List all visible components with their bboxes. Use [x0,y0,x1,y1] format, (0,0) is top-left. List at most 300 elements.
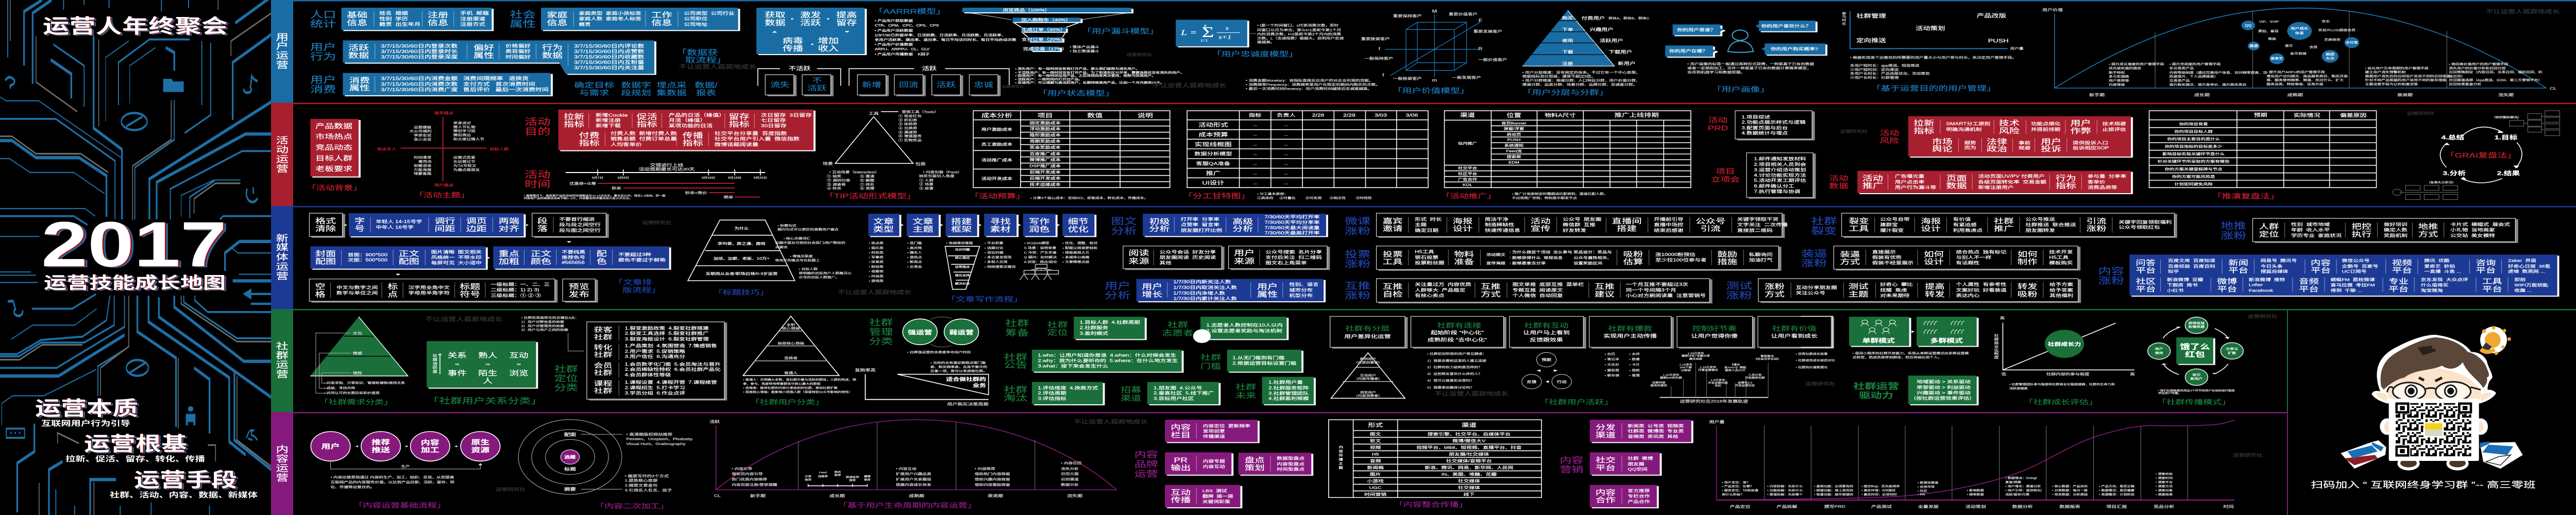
chart: 社群成长评估: 低 [2002,372,2006,376]
panel: 内容栏目: 呈现创意 [1203,428,1225,433]
table: 活动推广: 搜索框 [1506,154,1521,159]
watermark: 不让运营人孤寂地成长 [1074,419,1148,425]
chart: 产品生命周期S曲线: 数据报表 [2059,504,2080,509]
card: 投票涨粉: 物料 [1454,250,1474,259]
chart: 社群传播模式: 红包 [2185,350,2205,358]
table: 内容整合传播: 小游戏 [1367,478,1384,483]
chart: 产品生命周期S曲线: • 用户增长：渠道分析 [2005,485,2041,488]
card: 互推涨粉: 同一个号间隔3个月 [1626,287,1676,293]
chart: 社群传播模式: 获得收益 [2189,321,2205,325]
panel: 内容涨粉平台: 搜狐自媒体 [2261,269,2289,273]
panel: 社群用户关系分类: 度 [433,369,437,373]
table: 分工甘特图: 2/29 [1343,113,1355,118]
card: 地推涨粉: 卡片式 横幅式 展会式 [2450,221,2510,227]
table: 活动推广: 社区平台 [1458,171,1477,176]
heading: 社群志愿者: 志愿者 [1162,329,1193,337]
card: 互推涨粉: 专题互推 阅读原文 [1513,287,1563,293]
panel: 社群门槛: 1.从无门槛到有门槛 [1232,355,1285,360]
table: 内容整合传播: 时间营销 [1364,492,1386,496]
chart: 社群成长评估: 社 [1994,333,1999,338]
chart: 基于运营目的的用户管理: 少用户短时间：定向推送 [1850,67,1899,72]
chart: 社群需求分类金字塔 [310,317,408,395]
chart: 社群成长评估: 群 [1994,337,1999,341]
panel: 内容涨粉平台: 好奇心日报 36氪 [2508,264,2550,268]
chart: 用户价值模型立方体 [1246,9,1507,91]
text: 忠诚度说明: 度越高。 [1257,40,1275,44]
table: 活动推广: 站内推广 [1458,141,1477,145]
panel: 盘点策划: 数据型盘点 [1277,456,1304,460]
chart: 用户生命周期曲线: 建立用户流失预警机制 [2365,70,2406,74]
panel: 活动数据: 用户点击率 [1895,179,1924,184]
table: 活动预算: 百度推广成本 [1030,151,1061,156]
chart: 用户分层金字塔: 下载 [1562,49,1573,54]
chart: 适合做社群的业务: 适合做社群的 [946,376,986,382]
panel: 基础信息 注册信息: 性别 学历 [379,16,408,22]
panel: 活动风险: 并提前排期 [2031,127,2060,132]
text: AARRR 说明: • 产品用户活跃数据 [875,28,913,32]
card: 测试涨粉: 提高 [1925,283,1945,290]
chart: 2016年发展轨迹: 《社会化学互动》 [1754,357,1781,360]
chart: 社群传播模式 [2148,317,2243,395]
text: 用户常见顾虑: 3）这些群友喜欢什么样的人？ [1427,372,1482,376]
panel: 封面配图 正文配图: 次图：500*500 [348,257,388,263]
panel: 重点加粗 正文颜色 配色: 不要超过3种 [618,252,651,257]
chart: 用户分层金字塔: 付费用户 [1582,15,1605,21]
table: 分工甘特图 [1187,111,1428,187]
panel: 活动目的指标: 人均客单价 [611,142,642,147]
table: 活动推广: PUSH [1507,138,1521,142]
card: 测试涨粉: 关注公众号 [1796,290,1825,296]
chart: 社群传播模式: 吸引 [2193,373,2200,377]
panel: 封面配图 正文配图: 封面 [315,250,336,258]
card: 微课涨粉: 结束后感谢 [1654,228,1684,233]
card: 互推涨粉: 互推 [1383,283,1402,290]
heading: 社群管理分类: 分类 [869,337,893,346]
text: 忠诚度说明: • t是一个时间窗口，s代表消费次数，若时 [1257,23,1339,27]
text: 写作流程清单: • 网络搜索关键词 [985,265,1015,269]
card: 测试涨粉: 互动分享朋友圈 [1796,285,1837,290]
table: 活动推广: 系统通知 [1504,143,1523,147]
panel: 活动背景: 竞品动态 [315,144,352,151]
card: 项目立项会: 4.讨论功能实现方法 [1754,173,1806,178]
card: 地推涨粉 [2252,218,2515,242]
heading: 社群定位分类: 分类 [554,383,578,392]
table: 分工甘特图: ... [1284,181,1288,185]
panel: 封面配图 正文配图 [310,246,486,269]
tab label: 用户运营: 户 [276,42,289,51]
chart: 标题技巧: 众号的目标人群推广。 [799,276,839,279]
panel: 多群模式: 多群模式 [1930,337,1963,344]
table: 推演复盘法 [2149,111,2377,187]
chart: 内容运营生命周期曲线: • 内容推荐 [975,467,995,471]
panel: 社群运营驱动力: 地域驱动 > 关系驱动 [1917,379,1971,385]
text: 写作流程清单: • 反常态 [907,265,922,269]
panel: 社群未来: 3.社群管理团队 [1268,390,1309,396]
panel: 封面配图 正文配图: 配图 [399,258,419,266]
chart: 内容二次加工: Visual Hunt、Gratisography [626,442,686,446]
card: 社群定位分类: 1.裂变激励政策 4.裂变社群搭建 [625,325,709,331]
chart: 活动主题四象限: 情人节礼物 [453,125,476,129]
panel: 基础信息 注册信息: 注册渠道 [460,16,485,22]
chart: 内容运营生命周期曲线: • 内容引导 [732,467,752,471]
heading: 用户分析: 用户 [1105,281,1130,291]
table: 分工甘特图: ... [1253,123,1257,127]
heading: 内容品牌运营: 运营 [1134,470,1158,479]
card: 地推涨粉: 地推 [2418,222,2438,231]
chart: TIP活动形式模型: 营销工具（Tools） [902,110,939,114]
chart: 用户生命周期曲线: 益召回） [2449,74,2465,78]
watermark: 不让运营人孤寂地成长 [679,63,756,70]
chart: 用户生命周期曲线: 交易类产品 [2170,79,2190,82]
table: 内容整合传播: 内 [1338,445,1343,449]
panel: 活动风险: 风险 [1999,127,2020,135]
panel: 用户增长 用户属性: 属性 [1257,290,1278,299]
panel: 社群志愿者 [1193,317,1286,343]
chart: TIP活动形式模型: ④ 秒杀 [827,186,841,191]
panel: 内容栏目: 传播渠道 [1203,434,1225,439]
panel: 社群定位: 3.盈利模式 [1080,331,1108,336]
card: 社群裂变 [1842,213,2174,236]
chart: 产品生命周期S曲线: • 数据情况：是否健康 [2099,489,2134,492]
table: 推演复盘法: 实际情况 [2294,112,2320,118]
chart: 活动主题四象限: 用户痛点 [434,183,453,187]
panel: 社群运营驱动力: 荣誉驱动 > 利益驱动 [1917,385,1971,390]
heading: 社群管理分类 [869,318,893,346]
chart: TIP活动形式模型 [823,110,962,191]
heading: 装逼涨粉: 涨粉 [1801,258,1827,268]
chart: 产品生命周期S曲线: • 调查对象 [2156,489,2173,492]
card: 阅读来源: 来源 [1128,257,1149,265]
card: 投票涨粉: 至少拉100位参与者 [1655,257,1706,263]
panel: 活跃数据 偏好属性 行为数据: 3/7/15/30/60日内互粉量 [574,59,644,65]
chart: 用户生命周期曲线: • 提升用户ARPU的用户管理手段 [2266,70,2325,74]
panel: 内容涨粉平台: 百度文库 百度知道 [2168,258,2215,263]
chart: 活动主题四象限: 毒鸡汤 [418,159,432,164]
card: 活动PRD: 4.数据统计与埋点 [1741,130,1788,136]
chart: 产品生命周期S曲线: 复盘/规模 [2005,480,2021,484]
panel: AARRR 流程: 获取 [765,11,786,19]
table: 内容整合传播: 形式 [1368,422,1383,428]
chart: 用户价值模型立方体: f [1382,73,1384,78]
panel: 内容合作: 官方推荐 [1628,488,1650,493]
chart: 适合做社群的业务: 业务 [973,382,986,388]
chart: 用户价值模型立方体: 一般保持客户 [1364,56,1393,60]
panel: 家庭信息 工作信息: 公司类型 公司行业 [684,10,735,16]
panel: 活动目的指标: 付费 [579,131,600,140]
table: 内容整合传播: 社交媒体/音频平台 [1446,458,1492,463]
table: 活动预算: DSP推广成本 [1029,163,1061,168]
tab label: 社群运营: 运 [276,360,289,370]
chart: GRAI复盘法: （树状图拆解法） [2492,116,2521,119]
card: 测试涨粉: 表达内心 [1956,293,1980,298]
chart: 用户画像: • 用户画像的标签一般通过两种形式获得，一种是基于已有的数据 [1687,62,1815,66]
chart: 内容运营生命周期曲线 [709,419,1116,498]
chart: 用户生命周期曲线: QQ [2245,24,2252,27]
chart: 活动主题四象限: 张小龙说 [414,137,432,142]
card: 投票涨粉: : 为什么做这个活动 怎么参与 [1510,250,1572,254]
arrow: 单群到多群 [1911,331,1914,333]
chart: 用户生命周期曲线: 爱奇艺 [2270,57,2283,60]
text: 写作流程清单: S 场景：说明背景 [1024,246,1056,250]
text: 用户常见顾虑: • 社群初创阶段的用户常见顾虑： [1427,352,1486,356]
panel: 活跃数据 偏好属性 行为数据: 3/7/15/30/60日内收藏数 [574,54,644,60]
chart: 2016年发展轨迹: 服务的提供 [1651,384,1667,387]
chart: 强运营弱运营: 高、购买频率高，且其平衡中的 [930,365,987,369]
panel: 文章写作流程卡片: 写作 [1029,217,1049,226]
heading: 社群传播模式: 「社群传播模式」 [2157,399,2231,406]
panel: PR输出: 内容专题 [1203,459,1225,464]
chart: 内容运营生命周期曲线: 扩展用户兴趣品类 [896,472,931,476]
chart: 用户画像: 你的用户是谁？ [1677,27,1716,32]
chart: 用户状态模型: 活跃 [807,84,826,92]
chart: 产品生命周期S曲线: • 突发数据：分析原因 [2052,493,2088,496]
chart: 用户状态模型: 新增 [862,81,882,89]
chart: 用户画像: 会用到机器学习和数据挖掘。 [1687,70,1745,74]
chart: 标题技巧: 互联网从业者/职场白领/0-3岁运营 [706,271,777,276]
panel: 盘点策划 [1239,453,1311,475]
panel: 活跃数据 偏好属性 行为数据: 属性 [473,52,494,60]
chart: 预期行动反馈循环: 行动 [1557,380,1567,384]
card: 段落: 段与图之间空行 [559,228,601,233]
chart: 用户生命周期曲线: 滴币 [2285,44,2293,48]
text: 写作流程清单: • 优化、调整、校对 [1062,241,1097,245]
panel: 活动风险: 政治 [1987,145,2007,153]
cards: 社群用户活跃要素: 社群有连接 [1437,322,1481,329]
table: 活动推广: 启动页 [1506,132,1521,136]
panel: 活动目的指标: 指标 [729,120,750,128]
panel: 内容涨粉平台: 新浪微博 推特 [2249,277,2285,282]
heading: 测试涨粉: 涨粉 [1726,290,1752,300]
heading: 装逼涨粉: 装逼 [1801,249,1827,259]
table: 内容整合传播: 题 [1338,466,1344,470]
chart: 产品生命周期S曲线: • 渠道拆解：先拆哪个 [1767,493,1803,496]
text: 单群多群说明 [1853,351,1969,359]
card: 项目立项会: 1.邮件通知发放材料 [1754,156,1806,162]
chart: 社群成长评估: 活跃度越高 [2009,387,2028,390]
card: 微课涨粉: 开播前引导 [1654,216,1684,222]
text: 预算说明: • 计算4个核心成本：活动ROI，获客成本，转化成本，传播成本。 [1030,196,1148,200]
panel: 内容涨粉平台: 今日头条 [2261,264,2283,268]
heading: 微课涨粉: 微课 [1345,216,1371,226]
panel: 活动目的指标: 微博话题阅读量 [715,142,759,147]
panel: 社群用户关系分类 [427,341,536,388]
table: 分工甘特图: ... [1253,162,1257,166]
table: 内容整合传播: 视频平台、blibli、短视频、直播平台、抖音 [1416,445,1522,450]
heading: 用户分析 [1105,281,1130,300]
panel: 封面配图 正文配图: 首图：900*500 [348,252,388,258]
text: 单群多群说明: • 借用小程序的社群开放能力，实现从单群运营模式向多群运营模 [1853,351,1969,355]
card: 投票涨粉: 投票 [1383,250,1402,259]
card: 项目立项会: 7.执行管理与协调 [1754,188,1800,194]
text: 周边物料: • 帆布袋 [1604,373,1619,377]
table: 分工甘特图: ... [1253,133,1257,136]
chart: 用户生命周期曲线: 支付宝 [2346,41,2358,44]
cards: 社群用户活跃要素: 社群有爆款 [1608,325,1652,332]
panel: 社群用户关系分类: 事件 [448,370,467,377]
chart: 用户状态模型: 活跃 [937,81,956,89]
chart: 用户价值模型立方体: F [1479,19,1482,23]
text: 周边物料: • 卡片 [1629,363,1640,367]
heading: 活动PRD: PRD [1708,125,1728,132]
heading: 用户忠诚度模型: 「用户忠诚度模型」 [1212,50,1298,58]
panel: 封面配图 正文配图: 正文 [399,250,419,258]
chart: 用户状态模型: • 回流用户：有一段时间没用产品，之后突然回来再次使用，则称为回流用户。 [1015,74,1156,78]
panel: 内容涨粉平台: 平台 [2388,285,2409,293]
panel: 用户忠诚度公式: L = [1180,28,1197,37]
chart: 基于运营目的的用户管理: 社群管理 [1856,13,1886,19]
card: 社群定位分类: 2.裂变工具选择 5.裂变社群推广 [625,331,709,336]
panel: 消费属性: 3/7/15/30/60日内消费金额 消费间隔频率 退换货 [381,76,529,81]
icon: head [2371,335,2496,403]
card: 地推涨粉: 确定人数 [2384,227,2408,233]
panel: 社交平台: QQ空间 [1628,467,1648,471]
panel: 文章写作流程卡片: 文章 [873,217,894,226]
chart: 用户生命周期曲线: 针对不同产品根据的用户采用不同的留存措施 [2365,78,2447,82]
chart: 社群用户分类金字塔: 全职 [786,322,795,327]
card: 微课涨粉: 海报 [1453,217,1473,225]
chart: 社群需求分类金字塔: • 问答求助、分享知识、管理和储物/维持关系 [324,381,405,385]
panel: 活跃数据 偏好属性 行为数据: 3/7/15/30/60日内评论数 [574,43,644,49]
chart: 内容运营基础流程: 资源 [471,447,490,454]
chart: 产品生命周期S曲线: • 日常数据：每日一报 [2052,489,2088,492]
chart: 用户生命周期曲线: 大众 [2326,56,2335,60]
heading: 文章写作流程: 「文章写作流程」 [946,296,1023,303]
chart: TIP活动形式模型: 包装 [916,161,926,166]
panel: 分发渠道: 音频类 资讯类 其他 [1628,434,1678,439]
heading: 内容涨粉: 内容 [2098,266,2124,277]
chart: 用户生命周期曲线: 召回渠道选择（App推送、EDM、第三方营销平台） [2449,78,2543,82]
card: 投票涨粉: 吸粉 [1623,250,1643,259]
heading: 社群志愿者 [1162,321,1193,337]
panel: 初级分析 高级分析: 7/30/60天平均分享率 [1264,219,1320,225]
text: 写作流程清单: • 新观点 [907,260,922,264]
panel: 基础信息 注册信息 [342,8,492,30]
panel: PR输出 [1165,452,1231,475]
panel: 内容涨粉平台: 爱奇艺 秒拍 [2424,264,2455,268]
card: 互推涨粉: 图文单推 底部互推 菜单栏 [1513,282,1584,287]
chart: 活动时间轴: • 通常情况下，每类型产品的活动时间周期会在10-15天左右，最长至30天，短至1-3活动。而一般 [524,194,666,197]
card: 投票涨粉: H5工具 [1415,249,1434,254]
chart: 用户分层金字塔: 兴趣用户 [1590,27,1614,32]
panel: 文章写作流程卡片 [868,214,1094,236]
card: 用户来源: 支付后关注 扫二维码 [1265,254,1322,260]
chart: 产品生命周期S曲线: • 社区 [1918,489,1927,492]
chart: 用户分层金字塔: 下单 [1562,27,1573,32]
chart: 活动主题四象限: 李彦宏说 [414,133,432,138]
text: 社群价值: • 优秀社群成长故事 [1796,352,1827,355]
heading: 用户分析: 分析 [1105,290,1130,300]
panel: 互动传播: 互动 [1171,489,1191,496]
card: 投票涨粉: 宣传海报 [1486,261,1505,265]
icon: books right [2480,441,2523,469]
chart: 用户生命周期曲线: 京豆/PLUS/超级会员 [2318,28,2355,32]
crop zone: row 3, right [1801,213,2557,296]
card: 社群裂变: 爆汁裂变 [1880,228,1904,233]
card: 微课涨粉: 宣传 [1531,225,1550,233]
card: 投票涨粉: 鼓励 [1717,250,1737,259]
panel: AARRR 流程: 数据 [765,19,786,27]
panel: 基础信息 注册信息: 籍贯 出生年月 [379,22,420,27]
text: 写作流程清单: • 造热点 [907,255,922,259]
card: 项目立项会: 6.邮件确认分工 [1754,183,1794,188]
chart: 活动时间轴: 9月8日 [618,177,629,180]
chart: 内容二次加工: • 摘要写作的3个方式 [625,474,669,478]
card: 装逼涨粉: 设计 [1924,258,1944,266]
chart: 社群传播模式: 扩散 [2228,351,2236,355]
card: 互推涨粉 [1377,279,1709,302]
heading: 数据获取流程: 取流程」 [683,56,726,64]
heading: 社群用户分类: 「社群用户分类」 [751,399,824,406]
text: AARRR 说明: • 产品用户传播数据 K因子 [875,52,930,56]
heading: 微课涨粉 [1345,216,1371,236]
text: 高转化关键: 3）用户与用户之间的依赖 [521,328,568,332]
panel: 活跃数据 偏好属性 行为数据: 偏好 [473,44,494,52]
heading: 活动时间: 活动 [524,169,550,180]
chart: 2016年发展轨迹: 1.6日发布 [1710,379,1725,382]
panel: 活动数据: 活动 [1862,174,1883,182]
chart: 社群用户分类金字塔 [743,316,856,393]
panel: 用户忠诚度公式: n [1204,23,1207,27]
heading: 社群定位: 定位 [1047,329,1068,337]
text: 漏斗说明: • 独立渠道漏斗 [1070,49,1099,53]
text: 拉新促活留存转化传播: 拉新、促活、留存、转化、传播 [65,455,205,463]
table: 分工甘特图: 客服QA准备 [1196,161,1231,166]
heading: 社群管理分类: 社群 [869,318,893,328]
table: 分工甘特图: ... [1253,181,1257,185]
panel: 活跃数据 偏好属性 行为数据: 3/7/15/30/60日内关注量 [574,65,644,71]
panel: 文章写作流程卡片: 框架 [951,225,972,233]
panel: 封面配图 正文配图: 每屏可见 大小适中 [431,260,482,266]
heading: 社群筹备 公告 淘汰 [1004,319,1029,403]
chart: TIP活动形式模型: ④ 兑换券 [899,126,918,130]
heading: 投票涨粉: 投票 [1345,249,1370,260]
card: 微课涨粉: 引流 [1701,225,1721,233]
panel: 活动数据: 消费品类等 [2088,184,2117,190]
panel: 内容涨粉平台: 小红书 [2167,288,2183,293]
card: 测试涨粉: 给予方案 [2049,282,2073,287]
panel: 文章写作流程卡片: 素材 [990,225,1011,233]
panel: 家庭信息 工作信息: 家庭类型 家庭小孩标签 [579,10,641,16]
panel: 招募渠道: 2.垂直社区 5.线下推广 [1154,390,1214,396]
panel: 内容涨粉平台: 微信公众号 [2342,258,2369,263]
text: 数据获取流程步骤 [574,81,718,97]
card: 社群定位分类: 社群 [594,369,613,376]
chart: 社群用户分类金字塔: 核心领袖 [782,326,800,331]
card: 装逼涨粉: 模板购买 [2049,260,2073,266]
watermark: 运营研究社 [1127,52,1153,57]
panel: 盘点策划: 策划 [1245,464,1265,472]
panel: 社群用户关系分类: 跃 [433,366,437,369]
icon: QR code [2389,399,2479,461]
chart: 社群用户分类金字塔: • 连接者：能将社群的内容分享给别的社群，推动社群扩散 [743,386,838,389]
chart: 标题技巧: 将明确的目标用户人群概况公 [799,271,852,275]
text: 用户常见顾虑: 4）我可以做真实自我吗？ [1427,379,1474,383]
panel: 初级分析 高级分析: 7/30/60天最大阅读量 [1264,225,1320,230]
panel: 初级分析 高级分析: 打开率 分享率 [1181,216,1219,222]
chart: 用户价值模型立方体: 一般发展客户 [1452,75,1481,79]
panel: 内容涨粉平台: Facebook [2249,288,2273,293]
chart: 用户生命周期曲线: • 提升完成度的用户管理手段 [2170,62,2221,66]
panel: 活动风险: 提供投诉入口 [2073,140,2108,145]
table: 分工甘特图: ... [1284,171,1288,175]
card: 阅读来源 [1123,246,1222,269]
chart: 基于运营目的的用户管理: • 根据实现某个运营目的所需要的用户量大小与用户参与时长，来决定用户管理手段。 [1850,55,2016,60]
table: 推演复盘法: 你的项目指标的目标是多少 [2165,144,2222,148]
table: 活动推广 [1445,111,1691,187]
card: 地推涨粉: 把控 [2351,222,2372,231]
text: 写作流程清单: • 游戏类 [869,279,884,283]
table: 分工甘特图: 实现线框图 [1195,141,1232,147]
